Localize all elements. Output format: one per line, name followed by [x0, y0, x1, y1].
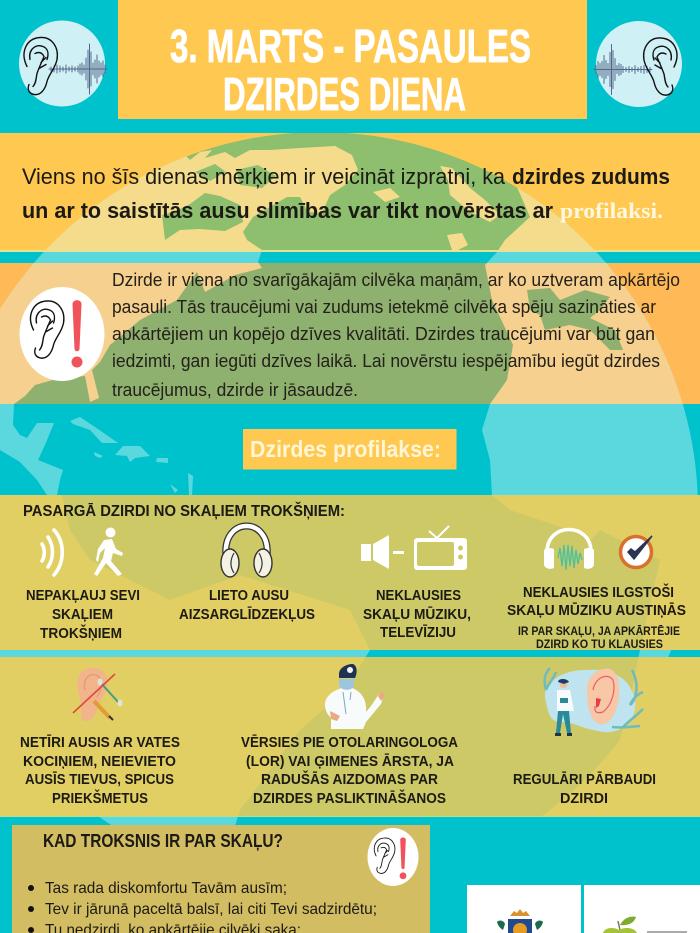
label: no long loud music in earphones: IR PAR SKAĻU, JA APKĀRTĒJIE: [518, 624, 680, 638]
label: avoid loud noise: [26, 588, 140, 642]
description text: iedzimti, gan iegūti dzīves laikā. Lai novērstu iespējamību iegūt dzirdes: [112, 350, 660, 371]
logo: green apple: [584, 885, 700, 933]
label: use ear protection: [179, 588, 315, 623]
label: do not clean ears with swabs: [20, 734, 180, 807]
label: check hearing regularly: DZIRDI: [560, 791, 608, 807]
label: do not clean ears with swabs: KOCIŅIEM, NEIEVIETO: [23, 754, 176, 770]
label: avoid loud noise: NEPAKĻAUJ SEVI: [26, 588, 140, 604]
intro text: [22, 164, 670, 223]
background: prevention band two: [0, 657, 700, 816]
icon: small ear with exclamation mark: [368, 828, 418, 886]
icon: sound waves: [42, 530, 62, 575]
label: no loud music or TV: NEKLAUSIES: [376, 588, 461, 604]
label: do not clean ears with swabs: AUSĪS TIEVUS, SPICUS: [25, 771, 174, 788]
list of signs: Tas rada diskomfortu Tavām ausīm;: [45, 880, 287, 897]
label: see an ENT or GP: VĒRSIES PIE OTOLARINGOLOGA: [241, 734, 458, 751]
description text: pasauli. Tās traucējumi vai zudums ietekmē cilvēka spēju sazināties ar: [112, 296, 656, 317]
background: teal strip with globe: [0, 250, 700, 263]
intro text: profilaksi.: [560, 198, 663, 223]
label: no long loud music in earphones: DZIRD KO TU KLAUSIES: [536, 637, 663, 651]
label: no long loud music in earphones: [507, 583, 686, 651]
list of signs: Tev ir jārunā paceltā balsī, lai citi Tevi sadzirdētu;: [45, 901, 377, 918]
label: no long loud music in earphones: SKAĻU MŪZIKU AUSTIŅĀS: [507, 602, 686, 619]
description text: [112, 269, 680, 400]
label: see an ENT or GP: [241, 734, 458, 807]
panel: when is noise too loud: [12, 825, 430, 933]
background: bottom teal band: [0, 816, 700, 825]
title: DZIRDES DIENA: [223, 68, 466, 120]
label: use ear protection: AIZSARGLĪDZEKĻUS: [179, 606, 315, 623]
description text: apkārtējiem un kopējo dzīves kvalitāti. Dzirdes traucējumi var būt gan: [112, 323, 655, 344]
intro text: Viens no šīs dienas mērķiem ir veicināt izpratni, ka: [22, 164, 506, 189]
panel heading: KAD TROKSNIS IR PAR SKAĻU?: [43, 831, 283, 851]
title: 3. MARTS - PASAULES: [170, 20, 531, 72]
background: intro band with globe: [0, 133, 700, 250]
background: teal band with globe: [0, 404, 698, 495]
list of signs: [28, 880, 377, 933]
icon: walking person: [94, 528, 123, 576]
label: no loud music or TV: [363, 588, 471, 641]
title panel: [118, 0, 587, 120]
icon: doctor: [325, 664, 385, 729]
label: avoid loud noise: TROKŠŅIEM: [40, 624, 122, 642]
label: see an ENT or GP: (LOR) VAI ĢIMENES ĀRSTA, JA: [246, 753, 454, 770]
label: see an ENT or GP: DZIRDES PASLIKTINĀŠANOS: [253, 789, 446, 807]
description text: Dzirde ir viena no svarīgākajām cilvēka maņām, ar ko uztveram apkārtējo: [112, 269, 680, 290]
icon: ear with sound wave, right: [594, 21, 682, 107]
icon: ear with sound wave, left: [19, 20, 107, 106]
background: prevention band one: [0, 495, 700, 650]
icon: speaker and TV: [361, 526, 467, 570]
label: see an ENT or GP: RADUŠĀS AIZDOMAS PAR: [261, 770, 438, 788]
background: description band with globe: [0, 263, 700, 404]
icon: headphones: [221, 526, 272, 577]
label: no long loud music in earphones: NEKLAUSIES ILGSTOŠI: [523, 583, 674, 601]
title: [170, 20, 531, 120]
icon: headphones with wave: [544, 530, 594, 570]
icon: ear with exclamation mark: [20, 287, 104, 381]
section heading: prevention: [243, 429, 456, 470]
label: no loud music or TV: TELEVĪZIJU: [380, 624, 456, 641]
heading: protect hearing from loud noise: PASARGĀ DZIRDI NO SKAĻIEM TROKŠŅIEM:: [23, 501, 345, 520]
background: header band: [0, 0, 700, 133]
logo: coat of arms: [467, 885, 581, 933]
intro text: un ar to saistītās ausu slimības var tikt novērstas ar: [22, 198, 553, 223]
label: use ear protection: LIETO AUSU: [209, 588, 289, 604]
label: check hearing regularly: [513, 771, 656, 807]
label: do not clean ears with swabs: NETĪRI AUSIS AR VATES: [20, 734, 180, 751]
icon: clock with check mark: [620, 536, 652, 568]
section heading: prevention: Dzirdes profilakse:: [250, 436, 441, 462]
intro text: dzirdes zudums: [512, 164, 670, 189]
background: teal divider strip: [0, 650, 671, 657]
label: avoid loud noise: SKAĻIEM: [52, 607, 113, 623]
label: no loud music or TV: SKAĻU MŪZIKU,: [363, 606, 471, 623]
icon: regular hearing check illustration: [545, 668, 643, 736]
label: do not clean ears with swabs: PRIEKŠMETUS: [52, 789, 148, 807]
description text: traucējumus, dzirde ir jāsaudzē.: [112, 379, 358, 400]
icon: ear with crossed swab and pencil: [73, 667, 122, 721]
label: check hearing regularly: REGULĀRI PĀRBAUDI: [513, 771, 656, 788]
